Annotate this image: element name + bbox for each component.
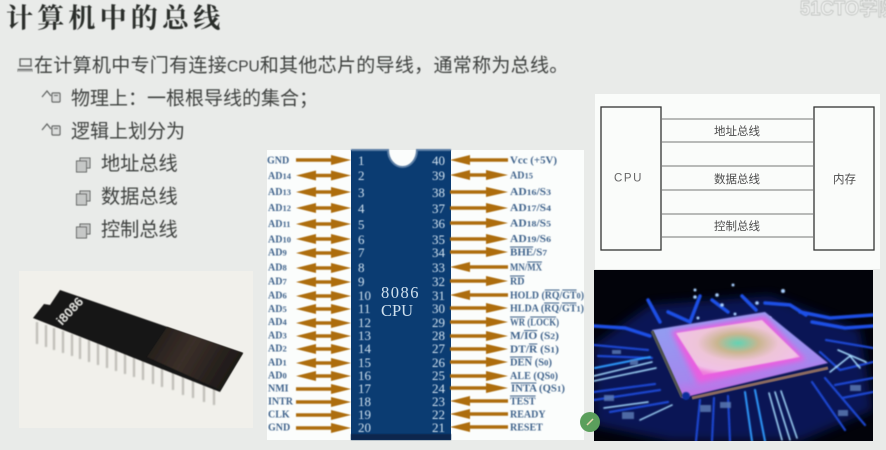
left pin numbers: 14 [358, 341, 372, 356]
icon: document stack 1 [76, 158, 90, 172]
right pin labels: DT/R (S1) [510, 344, 559, 356]
pinout diagram: 8086: CPU [381, 301, 413, 320]
left pin labels: AD10 [268, 234, 291, 246]
text: address bus: 地址总线 [101, 153, 178, 175]
circuit traces [594, 296, 873, 441]
right pin labels: M/IO (S2) [510, 331, 559, 342]
right pin numbers: 29 [432, 315, 445, 330]
left pin arrows [296, 155, 351, 433]
text: data bus: 数据总线 [101, 186, 178, 208]
right pin numbers: 38 [432, 185, 445, 200]
right pin numbers: 27 [432, 341, 446, 356]
icon: document stack 3 [76, 224, 90, 238]
magenta die [671, 316, 806, 384]
memory box [814, 107, 874, 250]
icon: tag bullet 2 [42, 124, 60, 135]
left pin numbers: 13 [358, 328, 371, 343]
right pin labels: RD [510, 276, 524, 288]
right pin labels: BHE/S7 [510, 248, 548, 258]
corner pad [682, 392, 690, 400]
bullet list [18, 50, 569, 241]
right pin labels: HOLD (RQ/GT0) [510, 290, 584, 302]
circuit glow [594, 296, 873, 441]
left pin labels [267, 156, 294, 434]
chip name: 8086 [381, 283, 420, 302]
right pin labels: AD 17/S4 [510, 203, 552, 214]
right pin labels: DEN (S0) [510, 358, 552, 368]
bus: address: 地址总线 [714, 124, 760, 138]
left pin numbers: 4 [358, 201, 365, 216]
right pin numbers: 25 [432, 368, 445, 383]
bus: control: 控制总线 [714, 219, 760, 233]
left pin numbers: 16 [358, 368, 372, 383]
right pin numbers: 22 [432, 407, 445, 422]
left pin labels: AD6 [268, 290, 287, 302]
right pin labels: Vcc (+5V) [510, 156, 557, 166]
left pin labels: AD8 [268, 262, 287, 274]
right pin labels: AD 18/S5 [510, 218, 551, 230]
left pin labels: AD13 [268, 187, 291, 198]
circuit pads [604, 350, 861, 419]
bus: data: 数据总线 [714, 172, 760, 186]
chip body [33, 290, 243, 392]
pinout diagram: 8086 [267, 150, 584, 440]
icon: document stack 2 [76, 191, 90, 205]
CPU box [601, 107, 661, 250]
right pin labels: AD 19/S6 [510, 234, 551, 245]
icon: tag bullet 1 [42, 91, 60, 102]
left pin labels: AD3 [268, 330, 287, 342]
CPU label: CPU [614, 172, 643, 184]
text: control bus: 控制总线 [101, 219, 178, 241]
right pin numbers [432, 153, 446, 435]
left pin numbers: 7 [358, 245, 365, 260]
bus: control [661, 214, 814, 237]
right pin labels: AD 16/S3 [510, 187, 551, 198]
left pin labels: GND [267, 156, 289, 166]
text: physical definition: 物理上：一根根导线的集合； [71, 84, 318, 110]
chip ceramic lid [147, 327, 243, 390]
right pin numbers: 24 [432, 381, 446, 396]
right pin numbers: 32 [432, 274, 445, 289]
right pin labels: RESET [510, 422, 543, 434]
left pin numbers: 10 [358, 288, 371, 303]
left pin labels: AD5 [268, 304, 287, 315]
right pin arrows [450, 155, 508, 432]
right pin numbers: 39 [432, 168, 445, 183]
right pin numbers: 23 [432, 394, 445, 409]
chip marking: i8086 [53, 294, 86, 328]
left pin labels: AD12 [268, 203, 291, 214]
package metal edges [652, 331, 828, 398]
bus: address [661, 119, 814, 142]
text: logical division: 逻辑上划分为 [71, 120, 185, 142]
right pin numbers: 36 [432, 216, 446, 231]
right pin numbers: 26 [432, 355, 446, 370]
bus: data [661, 166, 814, 190]
glowing dots [693, 284, 785, 320]
right pin labels [510, 156, 584, 434]
left pin labels: NMI [268, 384, 289, 394]
right pin numbers: 40 [432, 153, 445, 168]
chip pins [37, 322, 214, 405]
right pin numbers: 34 [432, 245, 446, 260]
left pin numbers: 15 [358, 355, 371, 370]
left pin numbers [358, 153, 372, 435]
left pin numbers: 9 [358, 274, 364, 289]
die core [676, 320, 800, 375]
left pin labels: GND [268, 422, 290, 434]
photo: i8086 chip [19, 271, 253, 428]
left pin numbers: 1 [358, 153, 364, 168]
left pin labels: AD0 [268, 370, 287, 382]
photo: glowing processor on circuit board [594, 270, 873, 441]
right pin labels: WR (LOCK) [510, 318, 559, 328]
annotation cursor: green circle [580, 412, 600, 432]
left pin numbers: 3 [358, 185, 364, 200]
left pin numbers: 19 [358, 407, 371, 422]
left pin numbers: 2 [358, 168, 364, 183]
icon: monitor bullet [18, 59, 32, 71]
bus diagram: CPU and memory [595, 94, 880, 269]
right pin labels: MN/MX [510, 262, 543, 274]
right pin numbers: 28 [432, 328, 445, 343]
left pin labels: AD9 [268, 248, 287, 258]
right pin numbers: 35 [432, 232, 445, 247]
left pin numbers: 11 [358, 301, 371, 316]
left pin numbers: 17 [358, 381, 372, 396]
left pin labels: AD2 [268, 344, 287, 354]
left pin numbers: 5 [358, 217, 364, 232]
right pin numbers: 31 [432, 288, 445, 303]
left pin numbers: 8 [358, 260, 364, 275]
left pin labels: AD4 [268, 317, 287, 328]
right pin numbers: 30 [432, 301, 445, 316]
memory label: 内存 [833, 172, 856, 186]
left pin labels: AD11 [268, 219, 290, 230]
text: main statement: 在计算机中专门有连接CPU和其他芯片的导线，通常称为总线。 [34, 50, 569, 78]
right pin numbers: 21 [432, 420, 445, 435]
right pin labels: ALE (QS0) [510, 371, 558, 382]
left pin labels: INTR [268, 396, 294, 408]
left pin numbers: 18 [358, 394, 371, 409]
left pin labels: CLK [268, 410, 290, 420]
right pin numbers: 33 [432, 260, 445, 275]
right pin labels: READY [510, 410, 546, 420]
chip package [351, 150, 451, 440]
right pin labels: AD15 [510, 170, 533, 182]
right pin labels: INTA (QS1) [511, 384, 565, 394]
left pin labels: AD1 [268, 358, 287, 368]
left pin numbers: 12 [358, 315, 371, 330]
right pin numbers: 37 [432, 201, 446, 216]
right pin labels: HLDA (RQ/GT1) [510, 304, 584, 314]
left pin numbers: 20 [358, 420, 371, 435]
left pin labels: AD7 [268, 276, 287, 288]
left pin labels: AD14 [268, 171, 292, 182]
right pin labels: TEST [510, 396, 536, 408]
processor package [652, 312, 828, 398]
left pin numbers: 6 [358, 232, 365, 247]
